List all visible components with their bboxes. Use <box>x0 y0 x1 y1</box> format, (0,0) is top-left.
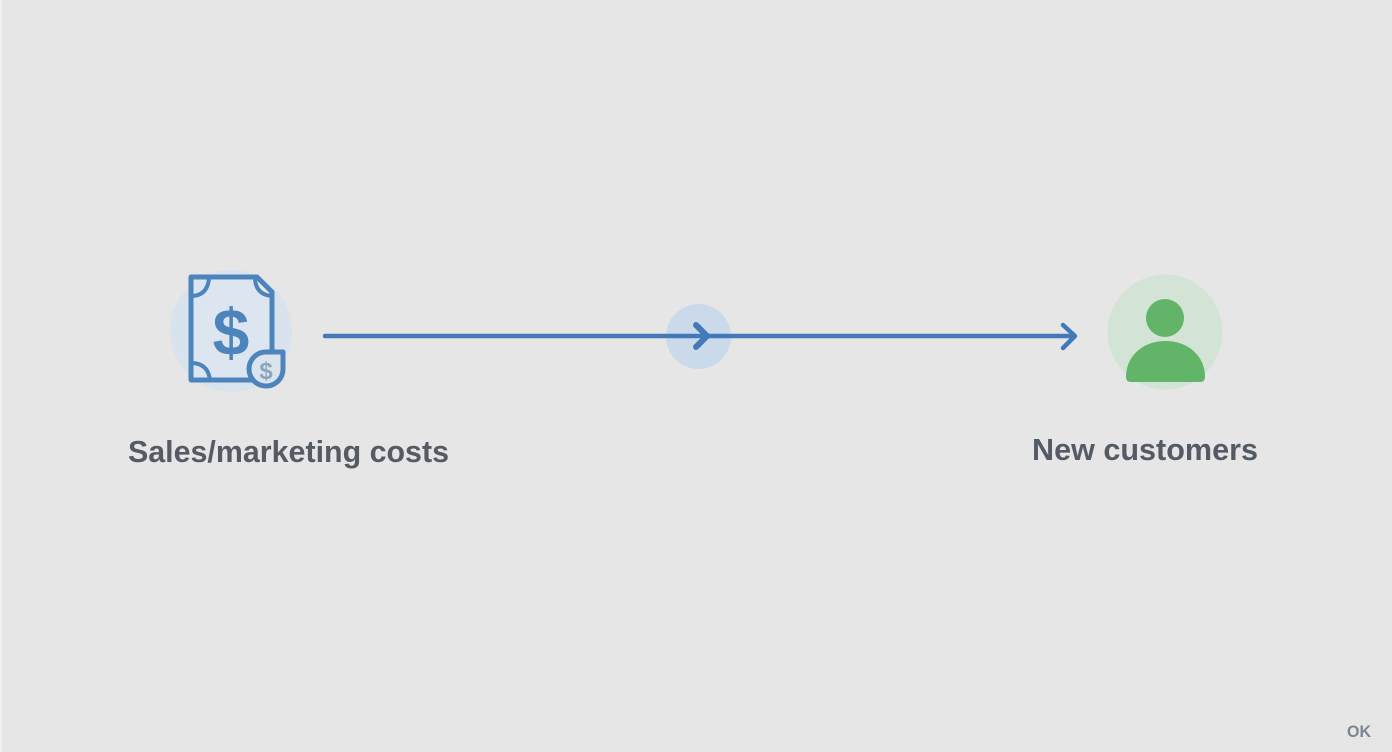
icon: money document: $ <box>259 358 273 385</box>
label: sales/marketing costs: Sales/marketing costs <box>128 434 449 469</box>
icon: customer person <box>1108 274 1222 390</box>
icon: money document: $ <box>213 295 249 369</box>
label: OK mark: OK <box>1347 722 1372 741</box>
arrow: main flow line <box>325 304 1075 369</box>
label: new customers: New customers <box>1032 432 1258 467</box>
icon: money document <box>170 270 292 392</box>
